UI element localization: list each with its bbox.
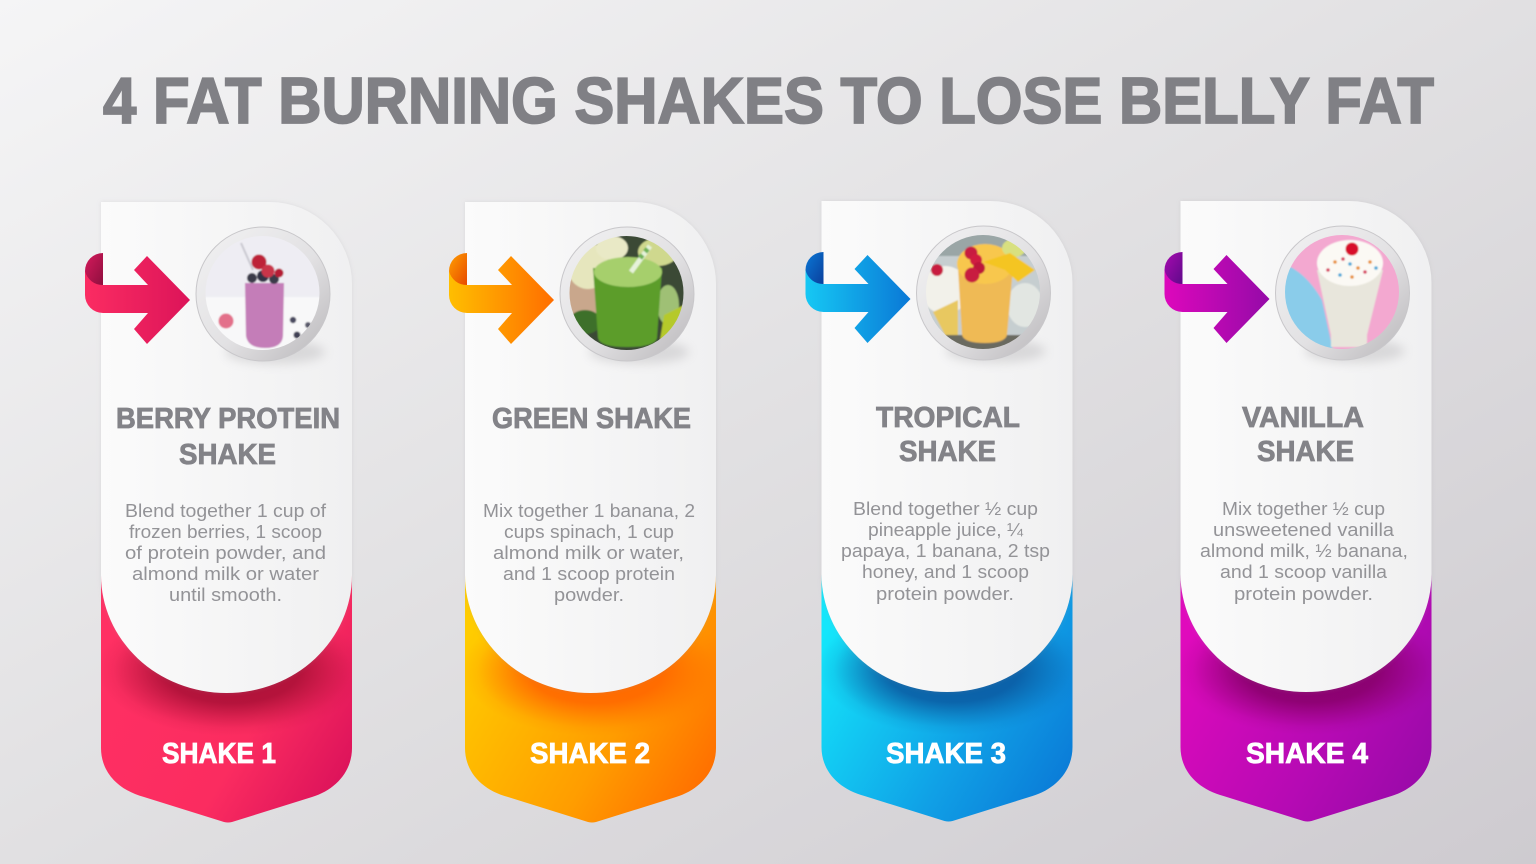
card shapes: shake 1	[85, 202, 367, 822]
label: shake 4: SHAKE 4	[1246, 738, 1368, 770]
recipe text: shake 4	[1200, 499, 1408, 604]
recipe text: shake 3: honey, and 1 scoop	[862, 562, 1029, 582]
recipe text: shake 3: protein powder.	[876, 584, 1014, 604]
recipe text: shake 2: Mix together 1 banana, 2	[483, 501, 695, 521]
photo: vanilla shake	[1285, 235, 1399, 349]
recipe text: shake 1	[125, 501, 327, 605]
recipe text: shake 1: until smooth.	[169, 585, 282, 605]
recipe text: shake 2: cups spinach, 1 cup	[504, 522, 674, 542]
recipe text: shake 4: almond milk, ½ banana,	[1200, 541, 1408, 561]
card shapes: shake 2	[449, 202, 731, 822]
panel: shake 4	[1164, 201, 1446, 822]
heading: shake 1: BERRY PROTEIN	[116, 403, 340, 435]
recipe text: shake 1: almond milk or water	[132, 564, 319, 584]
recipe text: shake 4: unsweetened vanilla	[1213, 520, 1395, 540]
recipe text: shake 4: Mix together ½ cup	[1222, 499, 1385, 519]
label: shake 3: SHAKE 3	[886, 738, 1006, 770]
heading: shake 3: TROPICAL	[876, 402, 1020, 434]
recipe text: shake 1: of protein powder, and	[125, 543, 326, 563]
heading: shake 2: GREEN SHAKE	[492, 403, 691, 435]
panel: shake 1	[85, 202, 367, 822]
recipe text: shake 2: powder.	[554, 585, 624, 605]
recipe text: shake 4: protein powder.	[1234, 584, 1373, 604]
heading: shake 4	[1242, 402, 1364, 468]
title: 4 FAT BURNING SHAKES TO LOSE BELLY FAT	[103, 64, 1434, 137]
recipe text: shake 3: pineapple juice, ¼	[868, 520, 1024, 540]
recipe text: shake 3: Blend together ½ cup	[853, 499, 1038, 519]
heading: shake 4: SHAKE	[1257, 436, 1354, 468]
recipe text: shake 1: Blend together 1 cup of	[125, 501, 327, 521]
heading: shake 4: VANILLA	[1242, 402, 1364, 434]
recipe text: shake 2	[483, 501, 695, 605]
heading: shake 1	[116, 403, 340, 471]
recipe text: shake 2: almond milk or water,	[493, 543, 684, 563]
label: shake 1: SHAKE 1	[162, 738, 276, 770]
heading: shake 3: SHAKE	[899, 436, 996, 468]
label: shake 2: SHAKE 2	[530, 738, 650, 770]
card shapes: shake 4	[1164, 201, 1446, 822]
photo: berry shake	[206, 236, 320, 350]
recipe text: shake 3: papaya, 1 banana, 2 tsp	[841, 541, 1050, 561]
recipe text: shake 1: frozen berries, 1 scoop	[129, 522, 322, 542]
card shapes: shake 3	[806, 201, 1088, 822]
photo: green shake	[570, 236, 684, 350]
photo: tropical shake	[926, 235, 1040, 349]
heading: shake 3	[876, 402, 1020, 468]
panel: shake 2	[449, 202, 731, 822]
recipe text: shake 3	[841, 499, 1050, 604]
recipe text: shake 4: and 1 scoop vanilla	[1220, 562, 1388, 582]
heading: shake 1: SHAKE	[179, 439, 276, 471]
panel: shake 3	[806, 201, 1088, 822]
recipe text: shake 2: and 1 scoop protein	[503, 564, 675, 584]
